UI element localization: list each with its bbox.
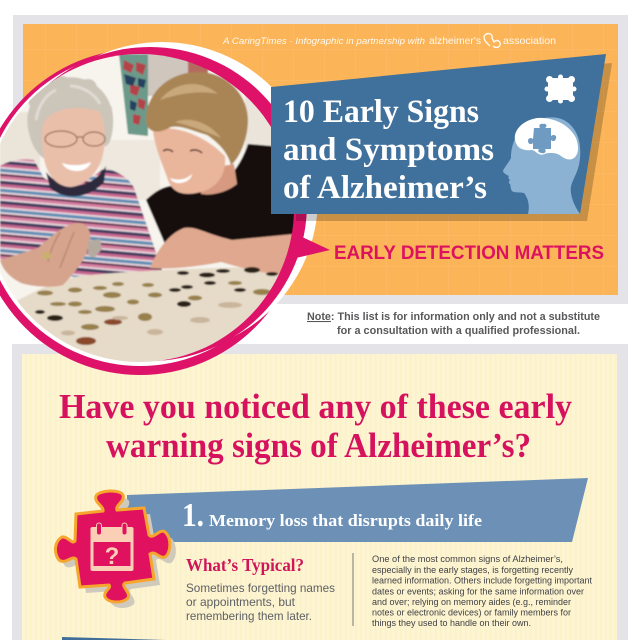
note: for a consultation with a qualified professional. (337, 325, 580, 337)
sign description: things they used to handle on their own. (372, 618, 531, 629)
what's typical: remembering them later. (186, 609, 312, 623)
what's typical: or appointments, but (186, 595, 296, 609)
what's typical: What’s Typical? (186, 555, 304, 575)
sign description: and over; relying on memory aides (e.g., reminder (372, 597, 572, 608)
title banner (271, 54, 612, 221)
title text: 10 Early Signs (283, 94, 479, 130)
icon: puzzle piece with calendar (55, 491, 176, 608)
partnership credit line: A CaringTimes · Infographic in partnership with (222, 36, 425, 47)
partnership credit line: association (503, 36, 556, 47)
note: Note: This list is for information only and not a substitute (307, 311, 600, 323)
what's typical: Sometimes forgetting names (186, 581, 335, 595)
calendar: ? (105, 543, 119, 570)
panel: warning signs (12, 344, 628, 640)
older woman face (42, 108, 105, 187)
older woman hand (0, 223, 90, 287)
sign description: especially in the early stages, is forgetting recently (372, 565, 573, 576)
partnership credit line: alzheimer's (429, 36, 481, 47)
table (17, 266, 279, 362)
icon: white puzzle piece (544, 74, 576, 104)
what's typical (186, 555, 335, 623)
icon: head with brain puzzle (503, 117, 580, 214)
older woman hair (27, 76, 113, 160)
partnership credit line (222, 34, 556, 47)
younger woman arm and hand (150, 228, 294, 274)
title text (283, 94, 494, 206)
main question heading: warning signs of Alzheimer’s? (106, 426, 531, 465)
older woman collar and neck (46, 166, 106, 196)
older woman shirt (0, 159, 162, 277)
sign 1 banner (127, 478, 588, 542)
main question heading (59, 387, 572, 465)
sign description: dates or events; asking for the same information over (372, 586, 585, 598)
blinds (0, 112, 40, 172)
older woman glasses (45, 131, 105, 147)
tagline: EARLY DETECTION MATTERS (334, 243, 604, 264)
sign 1 banner: Memory loss that disrupts daily life (209, 511, 482, 530)
younger woman shirt (146, 144, 297, 244)
panel: header (13, 15, 628, 304)
next sign banner (cropped) (62, 637, 200, 640)
note (307, 311, 600, 337)
title text: of Alzheimer’s (283, 170, 487, 206)
sign 1 banner: 1. (182, 497, 204, 534)
younger woman neck and face (200, 164, 237, 195)
puzzle pieces (35, 267, 278, 321)
sign description (372, 554, 592, 629)
circular photo with pink frame (0, 42, 330, 376)
main question heading: Have you noticed any of these early (59, 387, 572, 426)
title text: and Symptoms (283, 132, 494, 168)
sign description: learned information. Others include forgetting important (372, 576, 592, 586)
sign description: One of the most common signs of Alzheimer’s, (372, 554, 563, 565)
photo: two women doing a jigsaw puzzle (0, 50, 305, 376)
younger woman hair (146, 72, 248, 165)
sign description: notes or electronic devices) or family members for (372, 608, 572, 618)
